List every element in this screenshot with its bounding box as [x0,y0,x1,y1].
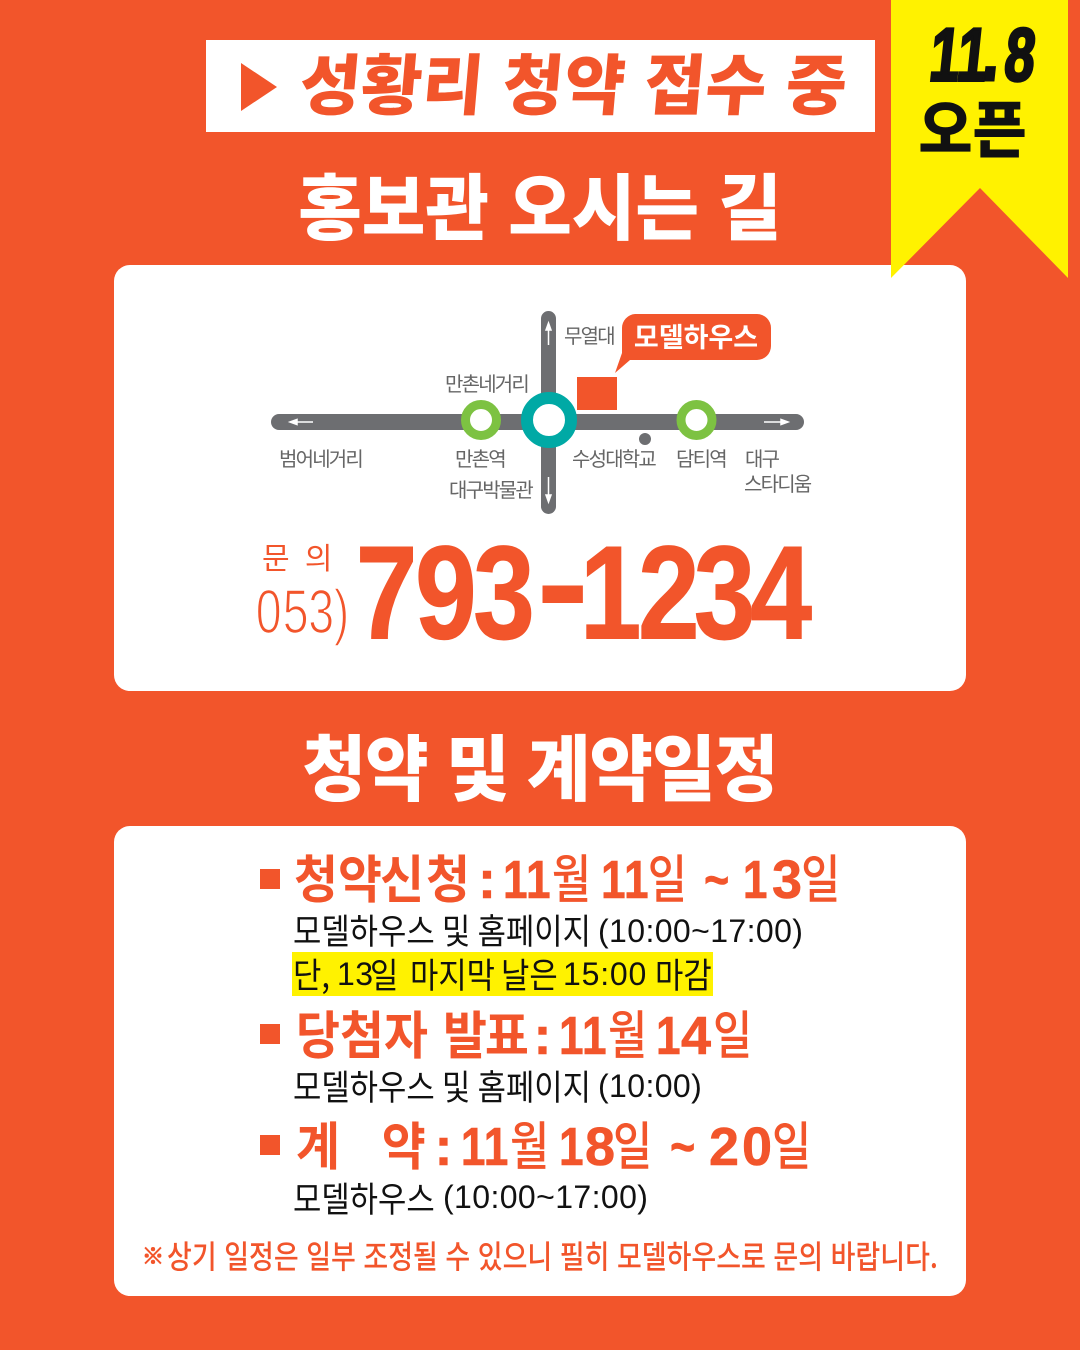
heading: schedule: 청약 및 계약일정 [303,731,777,811]
station: damti [681,404,712,436]
contract date: 계 [296,1106,340,1180]
interchange [527,398,571,442]
contract date: ~ [670,1118,695,1177]
map labels: 범어네거리 [279,443,362,472]
phone block [256,506,812,667]
badge date [926,0,1041,100]
model house marker [577,377,617,410]
contract date: 20 [709,1117,772,1177]
map labels: 스타디움 [744,468,812,497]
contract detail: (10:00~17:00) [443,1179,648,1215]
announcement date: 월 [608,994,647,1069]
subscription date: 월 [552,838,591,913]
map labels: 담티역 [676,443,726,472]
announcement date [296,994,752,1070]
announcement date: 4 [681,1006,711,1066]
badge open text: 오픈 [918,81,1027,170]
map labels [279,320,812,503]
phone number: - [537,506,589,660]
footnote: 상기 일정은 일부 조정될 수 있으니 필히 모델하우스로 문의 바랍니다. [167,1232,938,1278]
callout: model house: 모델하우스 [634,316,758,355]
contract detail [293,1172,648,1223]
subscription detail: 모델하우스 및 홈페이지 [293,904,591,955]
bullet 1 [260,869,280,889]
map labels: 무열대 [564,320,614,349]
icon: play triangle [241,63,277,111]
subscription date: ~ [704,851,729,910]
announcement detail: 모델하우스 및 홈페이지 [293,1060,591,1111]
announcement date: 일 [713,994,752,1069]
badge date: 8 [1001,13,1040,97]
subscription detail [293,904,803,955]
announcement date: 발표 [443,995,529,1070]
subscription date: 11 [503,850,551,910]
road arrows [290,323,788,502]
panel: map and contact [114,265,966,691]
schedule date lines [294,838,840,1180]
heading: directions: 홍보관 오시는 길 [298,170,782,250]
highlighted note: 13 [337,956,373,992]
map [271,311,812,514]
announcement date: 11 [559,1006,607,1066]
footnote: ※ [142,1239,164,1271]
map labels: 대구박물관 [449,474,533,503]
phone number: 793 [356,518,535,667]
station: mancheon [466,404,496,436]
bullet 2 [260,1024,280,1044]
bullet 3 [260,1135,280,1155]
subscription date: 일 [801,838,840,913]
contract date [296,1105,811,1181]
announcement date: : [534,1006,551,1066]
contract date: 8 [585,1117,615,1177]
highlighted note [292,952,713,996]
panel: schedule [114,826,966,1296]
announcement date: 1 [656,1006,681,1066]
badge date: 1 [926,13,965,97]
contract date: 월 [510,1105,549,1180]
map labels: 만촌역 [455,443,505,472]
top banner [206,40,875,132]
banner heading: 성황리 청약 접수 중 [297,49,851,123]
contract date: : [434,1117,452,1177]
subscription date: 1 [743,850,768,910]
map labels: 만촌네거리 [445,368,528,397]
phone number: 1234 [580,518,812,667]
subscription date: : [478,850,496,910]
subscription detail: (10:00~17:00) [598,913,803,949]
contract date: 11 [461,1117,508,1177]
university dot [639,433,651,445]
horizontal road [271,414,804,430]
yellow ribbon badge [891,0,1068,278]
highlighted note: 15:00 [563,956,647,992]
subscription date: 청약신청 [294,839,470,914]
map labels: 대구 [745,443,780,472]
badge date: . [978,0,1007,100]
map labels: 수성대학교 [572,443,656,472]
contact label: 문 의 [262,543,336,576]
vertical road [541,311,556,514]
subscription date: 11 [601,850,649,910]
contract date: 일 [772,1105,811,1180]
announcement date: 당첨자 [296,995,428,1070]
contract date: 1 [559,1117,584,1177]
callout: model house [615,314,771,373]
subscription date: 3 [772,850,802,910]
contract date: 약 [382,1106,426,1180]
area code: 053) [256,576,349,647]
subscription date [294,838,840,914]
contract detail: 모델하우스 [293,1172,435,1223]
contract date: 일 [613,1105,652,1180]
badge date: 1 [953,13,992,97]
announcement detail: (10:00) [598,1068,702,1104]
phone number [356,506,812,667]
subscription date: 일 [648,838,687,913]
